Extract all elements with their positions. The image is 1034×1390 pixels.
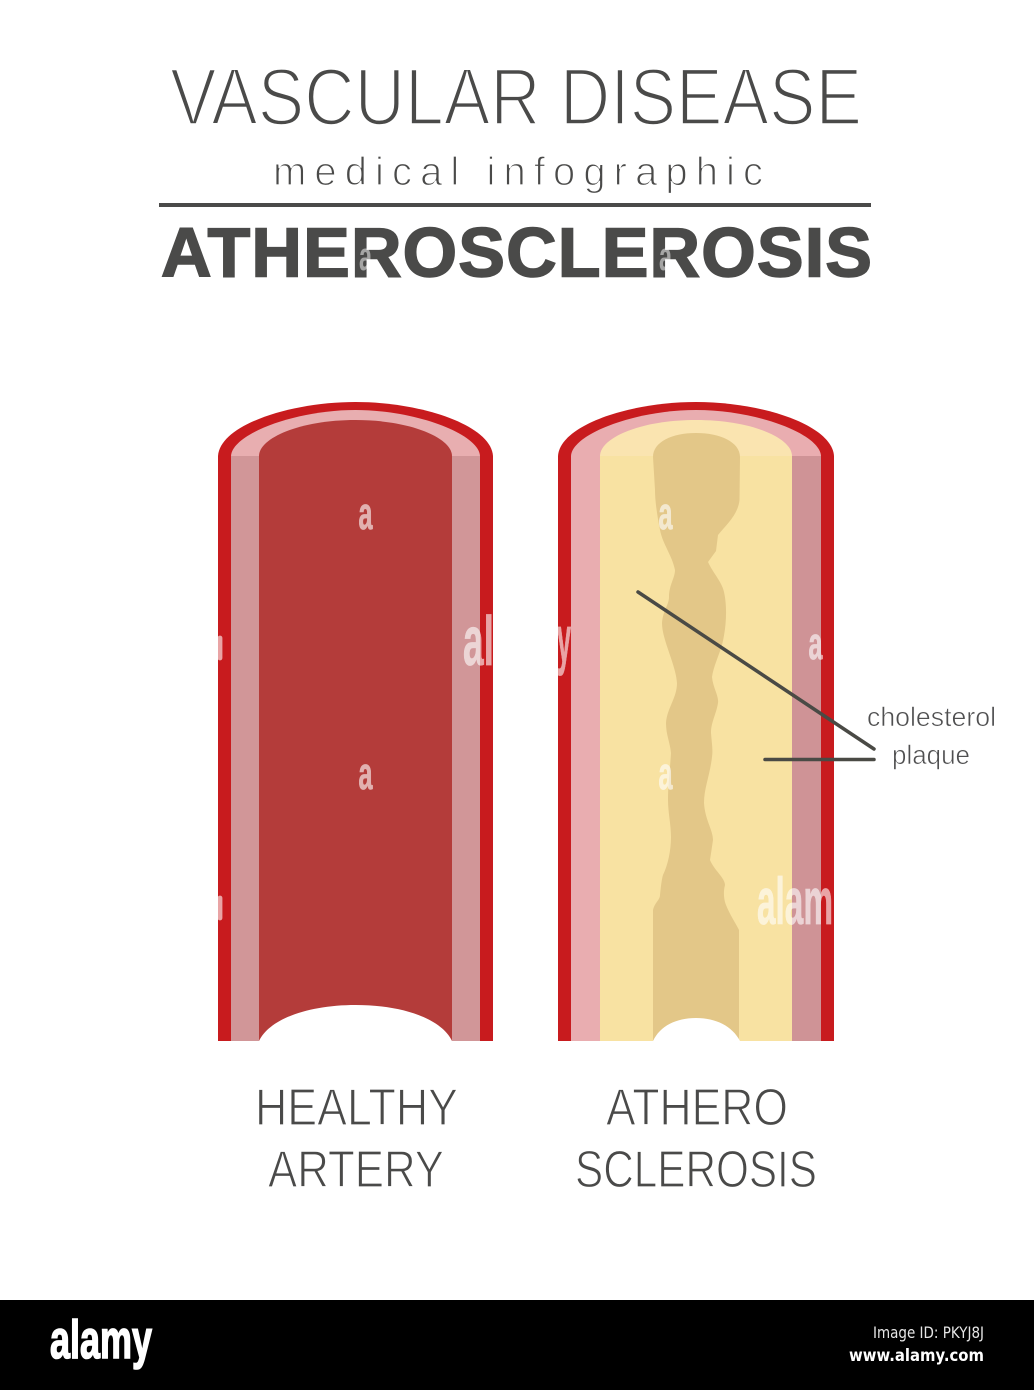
footer website: www.alamy.com bbox=[849, 1346, 984, 1366]
middle wall cap bbox=[231, 410, 480, 456]
label: atherosclerosis: ATHERO bbox=[606, 1079, 788, 1137]
callout line: cholesterol bbox=[638, 592, 874, 749]
middle wall left bbox=[231, 456, 259, 1041]
watermark: stock marks: a bbox=[658, 488, 673, 539]
lumen opening bbox=[653, 1018, 740, 1041]
watermark: heading marks bbox=[359, 235, 672, 279]
watermark: heading marks: a bbox=[359, 235, 372, 279]
plaque layer cap bbox=[600, 420, 792, 456]
label: healthy artery: ARTERY bbox=[268, 1141, 444, 1199]
narrowed channel bbox=[653, 433, 740, 1041]
title: vascular disease: VASCULAR DISEASE bbox=[170, 52, 862, 142]
cholesterol plaque bbox=[600, 456, 792, 1041]
watermark: stock marks: a bbox=[808, 618, 823, 669]
watermark: stock marks: al bbox=[463, 602, 494, 680]
watermark: stock marks bbox=[218, 488, 833, 938]
label: healthy artery: HEALTHY bbox=[255, 1079, 458, 1137]
outer artery wall bbox=[558, 402, 834, 1041]
lumen opening bbox=[259, 1005, 452, 1041]
outer artery wall bbox=[218, 402, 493, 1041]
watermark: stock marks: y bbox=[557, 602, 571, 676]
heading: atherosclerosis: ATHEROSCLEROSIS bbox=[161, 214, 872, 292]
callout label: cholesterol: cholesterol bbox=[867, 702, 996, 732]
middle wall left bbox=[571, 456, 600, 1041]
watermark: stock marks: a bbox=[658, 748, 673, 799]
callout line: plaque bbox=[765, 758, 874, 761]
callout label: plaque: plaque bbox=[892, 740, 970, 770]
watermark: stock marks: a bbox=[358, 488, 373, 539]
label: atherosclerosis bbox=[575, 1079, 817, 1199]
watermark: heading marks: a bbox=[659, 235, 672, 279]
watermark: stock marks: alam bbox=[757, 864, 833, 938]
footer logo: alamy bbox=[50, 1310, 152, 1370]
footer bar bbox=[0, 1300, 1034, 1390]
label: healthy artery bbox=[255, 1079, 458, 1199]
footer image id: Image ID: PKYJ8J bbox=[873, 1323, 984, 1342]
panel: atherosclerosis artery bbox=[558, 402, 834, 1041]
watermark: stock marks: a bbox=[358, 748, 373, 799]
heading rule bbox=[159, 203, 871, 207]
label: atherosclerosis: SCLEROSIS bbox=[575, 1141, 817, 1199]
middle wall right bbox=[792, 456, 821, 1041]
panel: healthy artery bbox=[218, 402, 493, 1041]
blood lumen bbox=[259, 420, 452, 1041]
middle wall right bbox=[452, 456, 480, 1041]
subtitle: medical infographic: medical infographic bbox=[273, 150, 763, 194]
middle wall cap bbox=[571, 410, 821, 456]
